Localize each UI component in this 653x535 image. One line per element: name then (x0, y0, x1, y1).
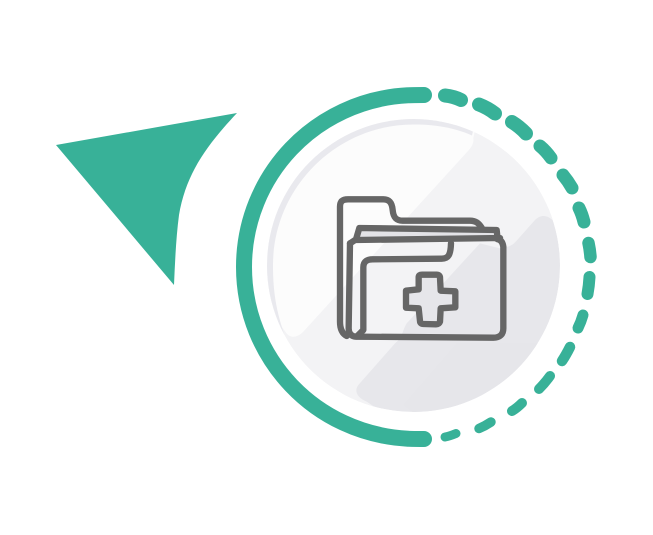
progress ring solid arc (244, 95, 424, 439)
inner pocket (357, 243, 451, 336)
folder icon with medical cross (340, 199, 503, 338)
back tab (340, 199, 482, 336)
middle sheet (350, 228, 500, 243)
secondary shadow band (417, 344, 538, 412)
infographic illustration (56, 87, 597, 447)
front folder body (349, 239, 503, 338)
arrow pointer (56, 113, 237, 285)
upper-left rim shade (267, 119, 473, 345)
pale highlight layer (273, 124, 474, 336)
medical cross (406, 275, 455, 324)
folder middle sheet tint (357, 228, 497, 237)
background disc (267, 119, 560, 412)
progress ring dashed arc (445, 96, 590, 437)
mid tone diagonal layer (282, 132, 552, 406)
